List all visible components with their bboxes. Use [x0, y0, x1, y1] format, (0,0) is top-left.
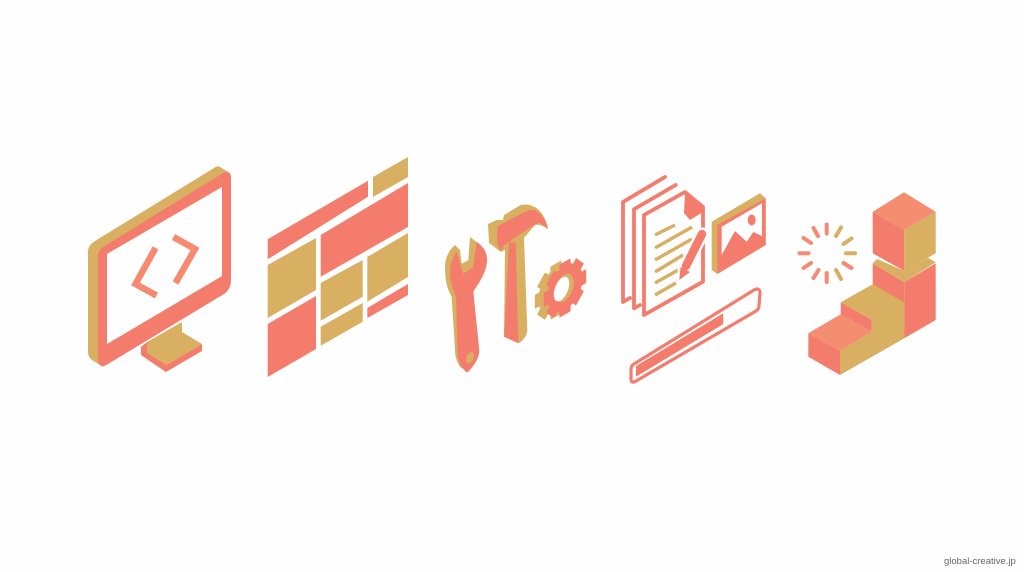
front page: [644, 192, 703, 315]
credit text: global-creative.jp: [944, 556, 1016, 567]
text lines: [655, 225, 692, 295]
monitor back edge: [88, 166, 230, 367]
monitor stand: [141, 322, 202, 372]
icon: hammer: [488, 205, 548, 343]
top cube: [873, 192, 936, 271]
lower block: [873, 258, 936, 338]
icon: documents with pencil: [623, 177, 703, 315]
code brackets: [136, 237, 195, 296]
page fold: [684, 192, 703, 220]
icon: image card: [712, 193, 766, 274]
icon: gear: [536, 251, 585, 327]
icon: isometric blocks: [808, 192, 936, 375]
back page: [623, 177, 665, 302]
middle page: [634, 185, 676, 308]
icon: loading spinner: [800, 224, 855, 282]
monitor face: [98, 172, 231, 366]
pencil: [679, 234, 702, 280]
icon: wrench: [445, 237, 487, 372]
icon: code monitor: [88, 166, 231, 372]
screen: [107, 187, 222, 344]
icon: layout grid: [268, 157, 408, 377]
icon: progress bar: [631, 289, 760, 382]
stairs: [808, 284, 904, 375]
